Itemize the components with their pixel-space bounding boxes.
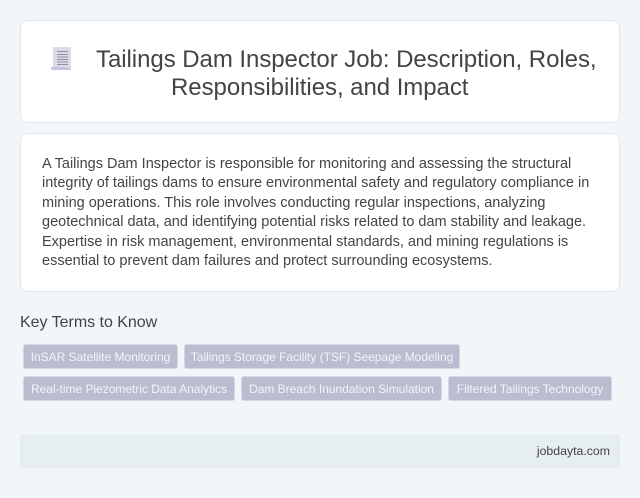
tag: TSF seepage: Tailings Storage Facility (TSF) Seepage Modeling (191, 350, 453, 364)
tag: dam breach: Dam Breach Inundation Simulation (249, 382, 434, 396)
tag: InSAR (23, 344, 178, 369)
heading: key terms: Key Terms to Know (20, 314, 157, 331)
text block: description: essential to prevent dam failures and protect surrounding ecosystems. (42, 253, 493, 269)
text block: description: integrity of tailings dams to ensure environmental safety and regulatory compliance in (42, 175, 589, 191)
panel: description card (20, 133, 620, 292)
heading: title line 1: Tailings Dam Inspector Job: Description, Roles, (96, 46, 597, 73)
text block: description (42, 156, 589, 269)
tag: piezometric: Real-time Piezometric Data Analytics (31, 382, 227, 396)
tag: TSF seepage (184, 344, 460, 369)
tag: dam breach (241, 376, 442, 401)
text block: description: Expertise in risk management, environmental standards, and mining regulations is (42, 234, 568, 250)
footer bar (20, 434, 620, 468)
text block: description: geotechnical data, and identifying potential risks related to dam stability and leakage. (42, 214, 586, 230)
tag: filtered tailings: Filtered Tailings Technology (457, 382, 603, 396)
footer: source: jobdayta.com (537, 444, 610, 458)
text block: description: mining operations. This role involves conducting regular inspections, analyzing (42, 195, 546, 211)
panel: title card (20, 20, 620, 123)
tag: InSAR: InSAR Satellite Monitoring (31, 350, 170, 364)
heading: title line 2: Responsibilities, and Impact (171, 74, 468, 101)
tag: piezometric (23, 376, 235, 401)
tag: filtered tailings (448, 376, 612, 401)
text block: description: A Tailings Dam Inspector is responsible for monitoring and assessing the structural (42, 156, 571, 172)
icon: document scroll (51, 47, 71, 70)
